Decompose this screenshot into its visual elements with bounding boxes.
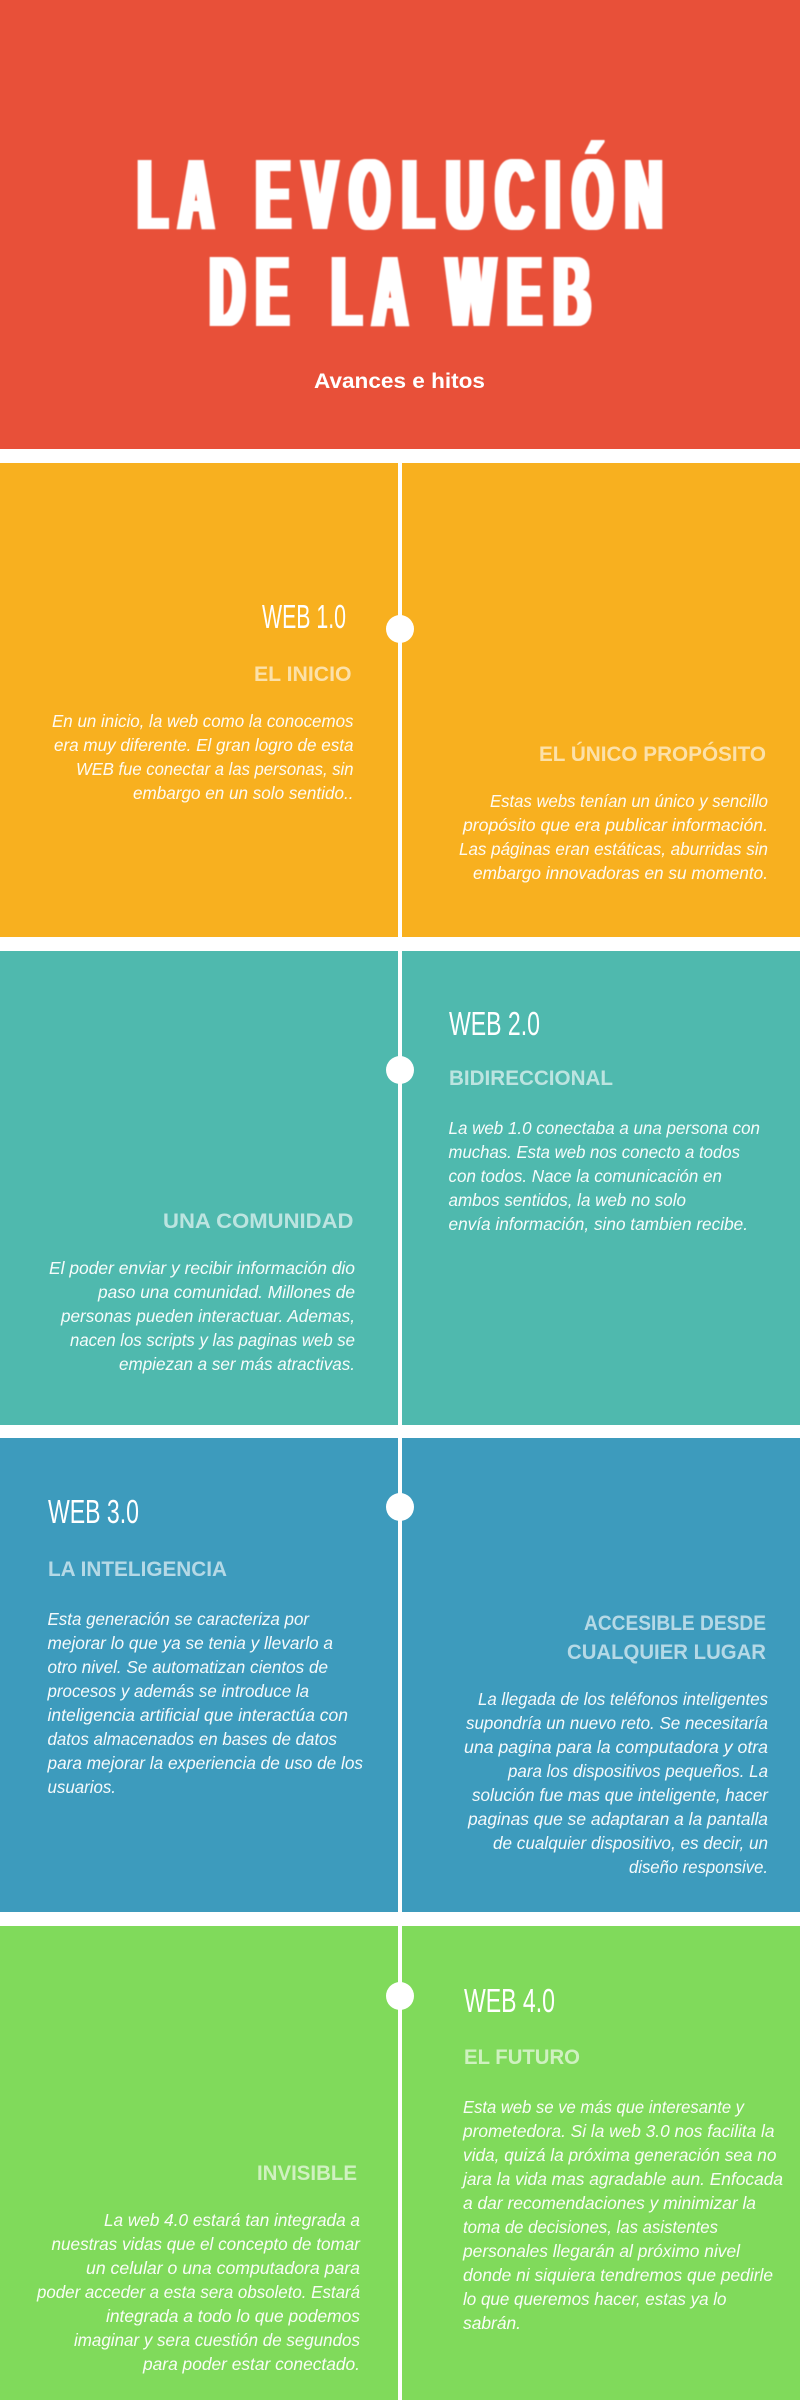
text block: invisible: integrada a todo lo que podemos (106, 2306, 360, 2326)
text block: accesible desde cualquier lugar: una pagina para la computadora y otra (464, 1737, 768, 1757)
text block: el futuro: lo que queremos hacer, estas ya lo (463, 2289, 727, 2309)
text block: una comunidad: El poder enviar y recibir información dio (49, 1258, 355, 1278)
label: web 1.0: WEB 1.0 (262, 598, 346, 635)
text block: la inteligencia: datos almacenados en bases de datos (48, 1729, 337, 1749)
text block: bidireccional: La web 1.0 conectaba a una persona con (448, 1118, 760, 1138)
label: web 2.0: WEB 2.0 (449, 1005, 540, 1042)
text block: bidireccional: envía información, sino tambien recibe. (448, 1214, 748, 1234)
panel: web 2.0 (0, 951, 800, 1425)
text block: la inteligencia: otro nivel. Se automatizan cientos de (48, 1657, 328, 1677)
text block: el futuro: vida, quizá la próxima generación sea no (463, 2145, 777, 2165)
text block: el único propósito: Estas webs tenían un único y sencillo (490, 791, 768, 811)
text block: invisible: un celular o una computadora para (86, 2258, 360, 2278)
text block: invisible: La web 4.0 estará tan integrada a (104, 2210, 360, 2230)
text block: el único propósito: embargo innovadoras en su momento. (473, 863, 768, 883)
panel: header (0, 0, 800, 449)
subtitle: Avances e hitos (314, 369, 485, 393)
text block: la inteligencia (47, 1609, 363, 1797)
panel: web 3.0 (0, 1438, 800, 1912)
text block: una comunidad: empiezan a ser más atractivas. (119, 1354, 355, 1374)
timeline node: web 4.0 (386, 1982, 414, 2010)
heading: bidireccional: BIDIRECCIONAL (449, 1067, 613, 1090)
heading: el futuro: EL FUTURO (464, 2046, 580, 2069)
text block: una comunidad (49, 1258, 355, 1374)
text block: el inicio: embargo en un solo sentido.. (133, 783, 354, 803)
text block: la inteligencia: para mejorar la experiencia de uso de los (47, 1753, 363, 1773)
text block: la inteligencia: Esta generación se caracteriza por (48, 1609, 310, 1629)
text block: el futuro: a dar recomendaciones y minimizar la (463, 2193, 756, 2213)
timeline node: web 3.0 (386, 1493, 414, 1521)
text block: accesible desde cualquier lugar: para los dispositivos pequeños. La (507, 1761, 768, 1781)
text block: bidireccional: ambos sentidos, la web no solo (448, 1190, 686, 1210)
text block: una comunidad: personas pueden interactuar. Ademas, (60, 1306, 355, 1326)
text block: la inteligencia: usuarios. (48, 1777, 116, 1797)
text block: accesible desde cualquier lugar: La llegada de los teléfonos inteligentes (478, 1689, 768, 1709)
text block: invisible: imaginar y sera cuestión de segundos (74, 2330, 360, 2350)
text block: accesible desde cualquier lugar: de cualquier dispositivo, es decir, un (493, 1833, 768, 1853)
panel: web 4.0 (0, 1926, 800, 2400)
heading: el único propósito: EL ÚNICO PROPÓSITO (539, 742, 766, 766)
text block: bidireccional: muchas. Esta web nos conecto a todos (448, 1142, 740, 1162)
text block: el futuro: prometedora. Si la web 3.0 nos facilita la (462, 2121, 775, 2141)
text block: el inicio: WEB fue conectar a las personas, sin (76, 759, 354, 779)
text block: accesible desde cualquier lugar (464, 1689, 769, 1877)
text block: el futuro: personales llegarán al próximo nivel (462, 2241, 741, 2261)
heading: accesible desde cualquier lugar: ACCESIBLE DESDE (584, 1612, 766, 1635)
text block: el único propósito: Las páginas eran estáticas, aburridas sin (459, 839, 768, 859)
text block: el inicio (52, 711, 354, 803)
text block: una comunidad: nacen los scripts y las paginas web se (70, 1330, 355, 1350)
text block: el único propósito: propósito que era publicar información. (462, 815, 768, 835)
text block: el futuro: donde ni siquiera tendremos que pedirle (463, 2265, 773, 2285)
text block: la inteligencia: inteligencia artificial que interactúa con (48, 1705, 348, 1725)
panel: web 1.0 (0, 463, 800, 937)
text block: accesible desde cualquier lugar: diseño responsive. (629, 1857, 768, 1877)
title: WEB (447, 236, 603, 348)
text block: el futuro: toma de decisiones, las asistentes (463, 2217, 718, 2237)
text block: el futuro: sabrán. (463, 2313, 521, 2333)
text block: invisible: nuestras vidas que el concepto de tomar (52, 2234, 361, 2254)
text block: invisible (36, 2210, 361, 2374)
heading: la inteligencia: LA INTELIGENCIA (48, 1558, 227, 1581)
text block: el inicio: era muy diferente. El gran logro de esta (54, 735, 354, 755)
text block: la inteligencia: mejorar lo que ya se tenia y llevarlo a (48, 1633, 333, 1653)
heading: el inicio: EL INICIO (254, 663, 352, 686)
text block: accesible desde cualquier lugar: solución fue mas que inteligente, hacer (472, 1785, 769, 1805)
text block: accesible desde cualquier lugar: supondría un nuevo reto. Se necesitaría (466, 1713, 768, 1733)
text block: invisible: para poder estar conectado. (142, 2354, 360, 2374)
text block: el inicio: En un inicio, la web como la conocemos (52, 711, 354, 731)
heading: accesible desde cualquier lugar: CUALQUIER LUGAR (567, 1641, 766, 1664)
text block: el futuro: jara la vida mas agradable aun. Enfocada (461, 2169, 783, 2189)
heading: invisible: INVISIBLE (257, 2162, 357, 2185)
label: web 4.0: WEB 4.0 (464, 1982, 555, 2019)
title: LA (332, 236, 419, 348)
text block: el futuro: Esta web se ve más que interesante y (463, 2097, 745, 2117)
heading: una comunidad: UNA COMUNIDAD (163, 1210, 354, 1233)
text block: bidireccional: con todos. Nace la comunicación en (448, 1166, 722, 1186)
heading: accesible desde cualquier lugar (567, 1612, 766, 1664)
text block: el único propósito (459, 791, 768, 883)
text block: bidireccional (448, 1118, 760, 1234)
timeline node: web 1.0 (386, 615, 414, 643)
title (138, 139, 675, 348)
text block: invisible: poder acceder a esta sera obsoleto. Estará (36, 2282, 360, 2302)
text block: una comunidad: paso una comunidad. Millones de (97, 1282, 355, 1302)
title: DE (210, 236, 300, 348)
text block: accesible desde cualquier lugar: paginas que se adaptaran a la pantalla (467, 1809, 768, 1829)
text block: la inteligencia: procesos y además se introduce la (47, 1681, 309, 1701)
label: web 3.0: WEB 3.0 (48, 1493, 139, 1530)
timeline node: web 2.0 (386, 1056, 414, 1084)
text block: el futuro (461, 2097, 783, 2333)
title: LA (138, 139, 225, 251)
